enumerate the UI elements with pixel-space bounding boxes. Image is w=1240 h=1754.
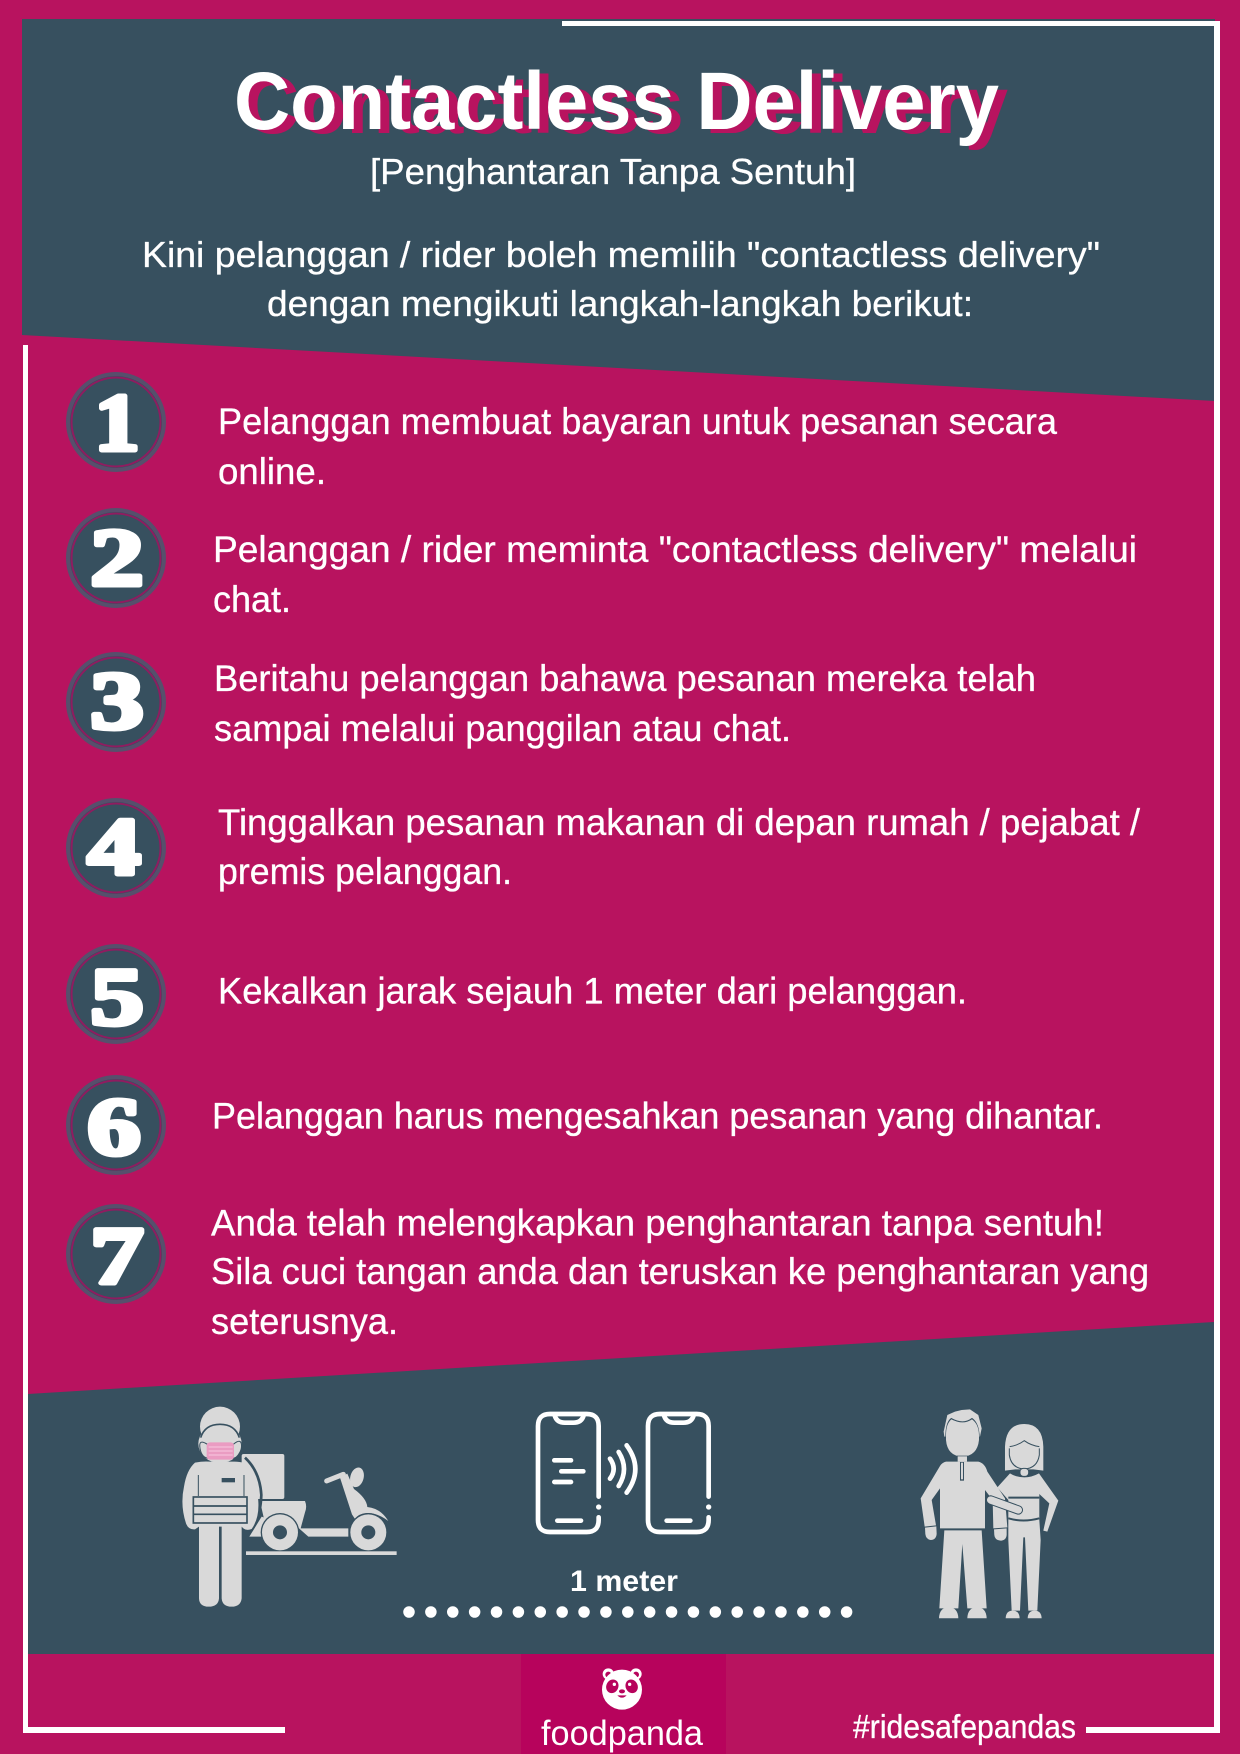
step 2 text: chat. <box>213 579 291 620</box>
step 1 <box>68 374 1057 492</box>
step 7 text: Sila cuci tangan anda dan teruskan ke penghantaran yang <box>211 1251 1149 1292</box>
number badge 4: 4 <box>87 801 141 892</box>
step 6 text: Pelanggan harus mengesahkan pesanan yang dihantar. <box>212 1096 1103 1136</box>
dotted distance line <box>409 1606 848 1618</box>
step 5 text: Kekalkan jarak sejauh 1 meter dari pelanggan. <box>218 970 967 1012</box>
number badge 2 <box>68 510 164 606</box>
delivery box <box>242 1454 284 1499</box>
step 1 text <box>218 401 1057 492</box>
step 7 <box>68 1202 1149 1342</box>
subtitle: [Penghantaran Tanpa Sentuh] <box>370 151 856 192</box>
panel: bottom illustrations background <box>28 1322 1214 1654</box>
step 1 text: online. <box>218 451 326 492</box>
intro text: Kini pelanggan / rider boleh memilih "contactless delivery" <box>142 234 1100 275</box>
distance label: 1 meter <box>570 1565 678 1598</box>
brand name: foodpanda <box>541 1714 704 1753</box>
step 3 text <box>214 658 1036 749</box>
number badge 2: 2 <box>90 512 144 603</box>
step 4 text: Tinggalkan pesanan makanan di depan rumah / pejabat / <box>218 802 1141 843</box>
number badge 3 <box>68 654 164 750</box>
step 7 text: Anda telah melengkapkan penghantaran tanpa sentuh! <box>211 1202 1104 1244</box>
step 4 text: premis pelanggan. <box>218 851 512 892</box>
intro text: dengan mengikuti langkah-langkah berikut: <box>267 283 973 324</box>
number badge 1: 1 <box>94 377 140 468</box>
step 4 text <box>218 802 1141 892</box>
icon: panda logo <box>602 1668 642 1710</box>
rider figure <box>182 1407 261 1607</box>
step 4 <box>68 800 1141 896</box>
man <box>921 1409 1018 1618</box>
step 7 text <box>211 1202 1149 1342</box>
step 3 text: sampai melalui panggilan atau chat. <box>214 708 791 749</box>
number badge 5: 5 <box>90 951 144 1042</box>
step 6 <box>68 1077 1103 1173</box>
step 2 text <box>213 529 1137 620</box>
icon: two phones with signal <box>538 1414 711 1532</box>
step 2 text: Pelanggan / rider meminta "contactless delivery" melalui <box>213 529 1137 570</box>
scooter <box>246 1466 397 1555</box>
icon: customer couple <box>921 1409 1058 1618</box>
number badge 1 <box>68 374 164 470</box>
number badge 4 <box>68 800 164 896</box>
intro text <box>142 234 1100 324</box>
logo panel <box>521 1654 726 1754</box>
icon: rider with scooter <box>182 1407 397 1607</box>
step 3 text: Beritahu pelanggan bahawa pesanan mereka telah <box>214 658 1036 699</box>
right phone <box>648 1414 711 1532</box>
number badge 6: 6 <box>87 1081 141 1172</box>
step 5 <box>68 946 967 1042</box>
step 3 <box>68 654 1036 750</box>
left phone <box>538 1414 601 1532</box>
step 2 <box>68 510 1137 620</box>
number badge 3: 3 <box>90 655 144 746</box>
number badge 7 <box>68 1206 164 1302</box>
title: Contactless Delivery <box>243 60 1008 151</box>
step 7 text: seterusnya. <box>211 1301 398 1342</box>
number badge 5 <box>68 946 164 1042</box>
hashtag: #ridesafepandas <box>853 1708 1076 1745</box>
signal waves <box>610 1445 635 1493</box>
title: Contactless Delivery <box>234 56 999 147</box>
step 1 text: Pelanggan membuat bayaran untuk pesanan secara <box>218 401 1057 442</box>
panel: header <box>22 19 1215 401</box>
woman <box>997 1424 1058 1618</box>
number badge 6 <box>68 1077 164 1173</box>
number badge 7: 7 <box>90 1210 144 1301</box>
